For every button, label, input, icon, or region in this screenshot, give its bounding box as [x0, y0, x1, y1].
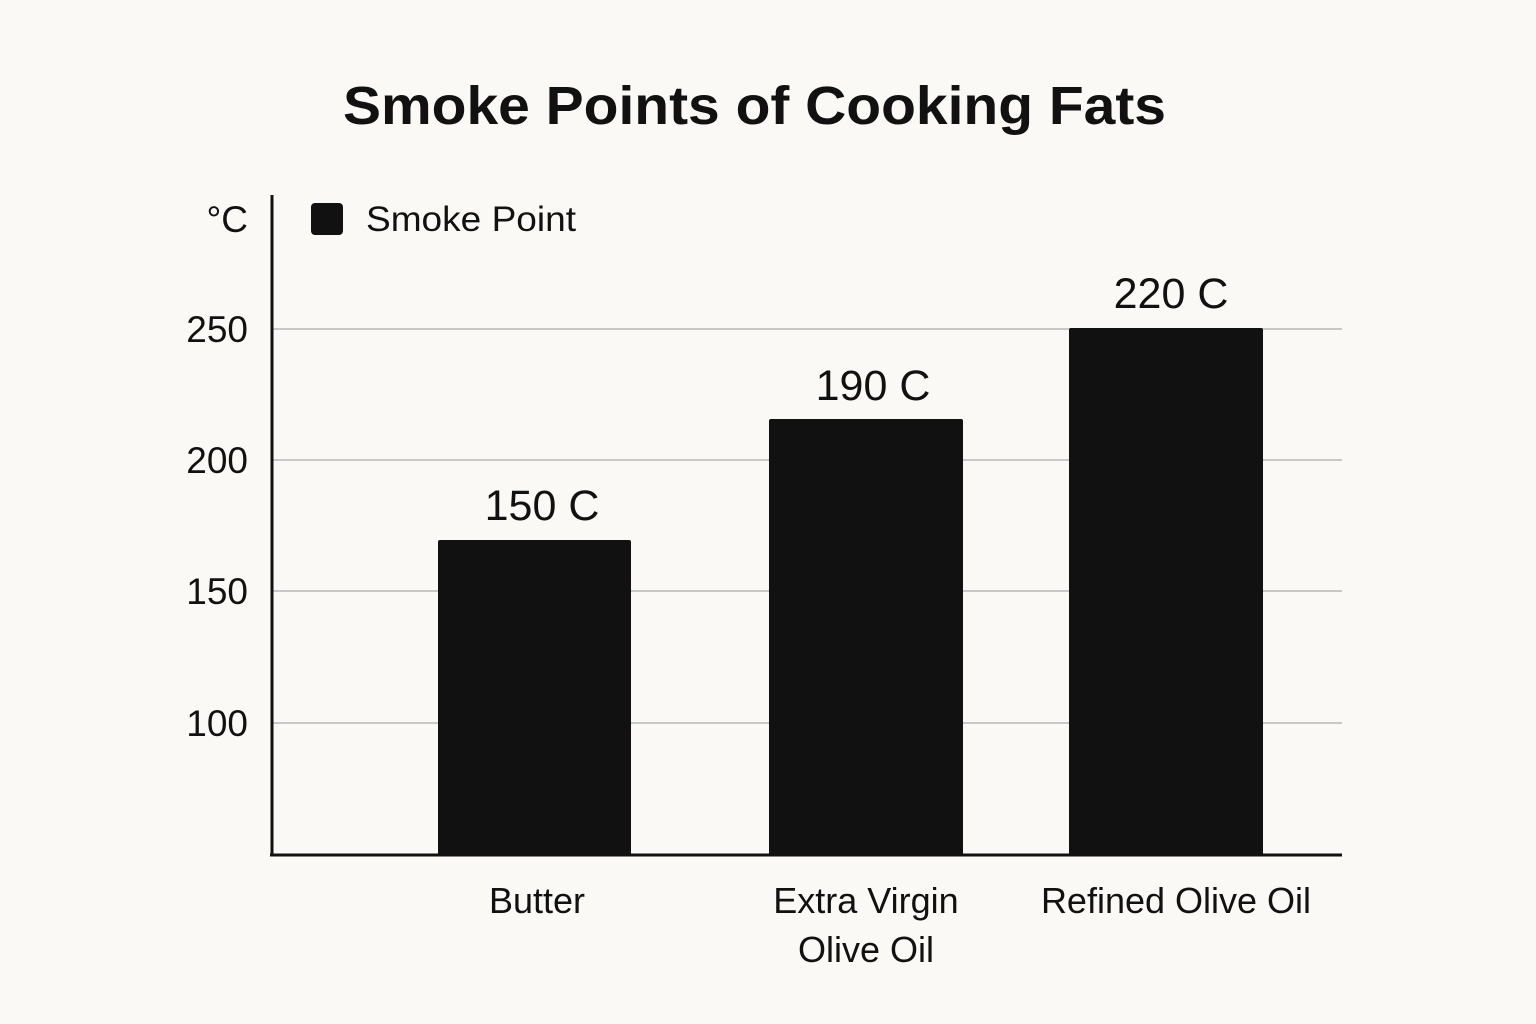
y axis: 150 [186, 571, 248, 612]
y axis: 100 [186, 703, 248, 744]
title: Smoke Points of Cooking Fats [343, 76, 1166, 136]
category labels: Butter [489, 880, 585, 921]
bar: butter: 150 C [485, 482, 599, 530]
y axis: 250 [186, 309, 248, 350]
bar: extra virgin olive oil: 190 C [816, 362, 930, 410]
category labels: Extra Virgin [773, 880, 959, 921]
x axis [270, 854, 1342, 856]
y axis [186, 195, 272, 856]
category labels [489, 880, 1311, 970]
category labels: Refined Olive Oil [1041, 880, 1311, 921]
bar: refined olive oil: 220 C [1114, 270, 1228, 318]
category labels: Olive Oil [798, 929, 934, 970]
bar: extra virgin olive oil [769, 362, 963, 855]
bar chart [186, 195, 1342, 970]
bar: refined olive oil [1069, 270, 1263, 855]
y axis: 200 [186, 440, 248, 481]
y axis: °C [206, 199, 248, 240]
bar: butter [438, 482, 631, 855]
legend: Smoke Point [366, 200, 576, 239]
